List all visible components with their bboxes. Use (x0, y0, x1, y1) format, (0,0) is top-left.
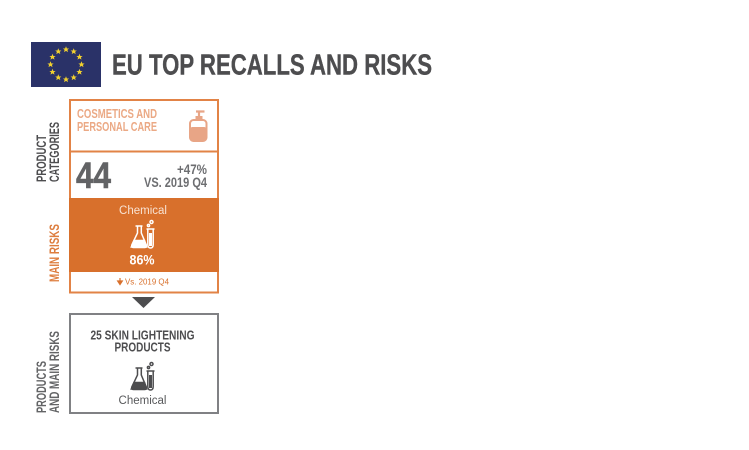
category name: COSMETICS AND (77, 106, 157, 121)
icon: flask and test tube (131, 220, 154, 248)
product heading: 25 SKIN LIGHTENING (90, 328, 194, 342)
icon: EU flag (31, 42, 101, 87)
arrow (132, 297, 155, 308)
category name (77, 106, 157, 134)
title: EU TOP RECALLS AND RISKS (112, 50, 432, 82)
label: products and main risks (34, 331, 62, 413)
risk trend: Vs. 2019 Q4 (125, 276, 169, 286)
label: products and main risks: PRODUCTS (34, 361, 49, 413)
product heading (90, 328, 194, 354)
label: product categories (34, 122, 62, 182)
label: main risks: MAIN RISKS (47, 224, 62, 282)
panel: chemical risk: 86% (130, 252, 155, 268)
category name: PERSONAL CARE (77, 119, 157, 134)
icon: flask and test tube (131, 362, 154, 390)
change vs 2019 Q4 (144, 162, 207, 190)
risk name: Chemical (119, 395, 166, 407)
change vs 2019 Q4: VS. 2019 Q4 (144, 175, 207, 190)
label: product categories: CATEGORIES (47, 122, 62, 182)
label: products and main risks: AND MAIN RISKS (47, 331, 62, 413)
panel: category card (69, 100, 219, 292)
panel: chemical risk (69, 198, 219, 272)
change vs 2019 Q4: +47% (177, 162, 207, 177)
icon: pump bottle (190, 112, 206, 141)
product heading: PRODUCTS (114, 340, 171, 354)
recall count: 44 (76, 155, 111, 196)
panel: chemical risk: Chemical (119, 205, 167, 217)
panel: products (70, 314, 218, 413)
label: product categories: PRODUCT (34, 134, 49, 182)
